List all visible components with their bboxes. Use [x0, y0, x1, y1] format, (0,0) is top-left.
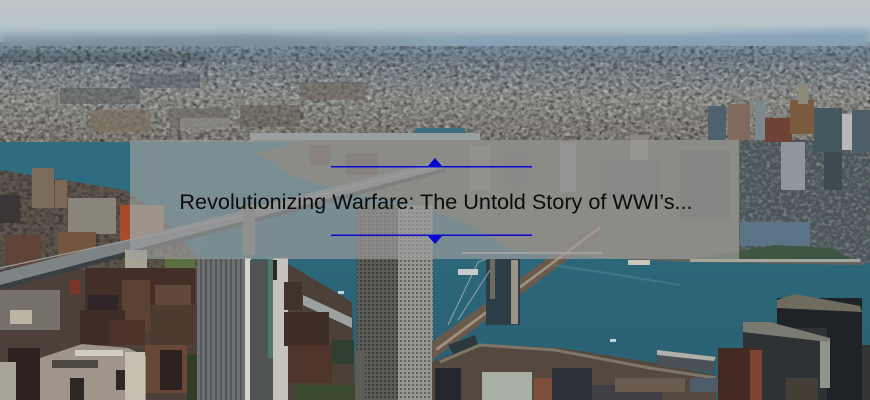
waterfront drive and low-rise, bottom centre	[432, 344, 718, 400]
sky	[0, 0, 870, 42]
river water	[0, 142, 870, 400]
Brooklyn Bridge	[432, 222, 602, 360]
horizon haze and distant bay	[0, 30, 870, 62]
right side city block	[690, 140, 870, 262]
Manhattan Bridge	[0, 160, 445, 290]
brick blocks beside tower	[284, 282, 355, 400]
red-brick housing blocks, left	[0, 268, 199, 400]
land texture	[255, 140, 870, 265]
title text: Revolutionizing Warfare: The Untold Story of WWI’s...	[179, 189, 693, 214]
buildings behind panel	[310, 135, 730, 220]
translucent title panel	[130, 140, 739, 259]
Manhattan upper blocks	[0, 165, 210, 276]
Gehry-style tower	[355, 205, 433, 400]
tall grey tower	[197, 258, 288, 400]
Manhattan shore land	[0, 168, 355, 400]
white-topped building, bottom left	[40, 344, 146, 400]
top divider with triangle	[331, 158, 532, 168]
distant city	[0, 46, 870, 158]
bottom divider with triangle	[331, 234, 532, 244]
boats and wake	[338, 260, 680, 342]
Brooklyn shore land	[255, 140, 870, 265]
midtown towers upper right	[708, 84, 870, 152]
dark office buildings, bottom right	[718, 294, 870, 400]
